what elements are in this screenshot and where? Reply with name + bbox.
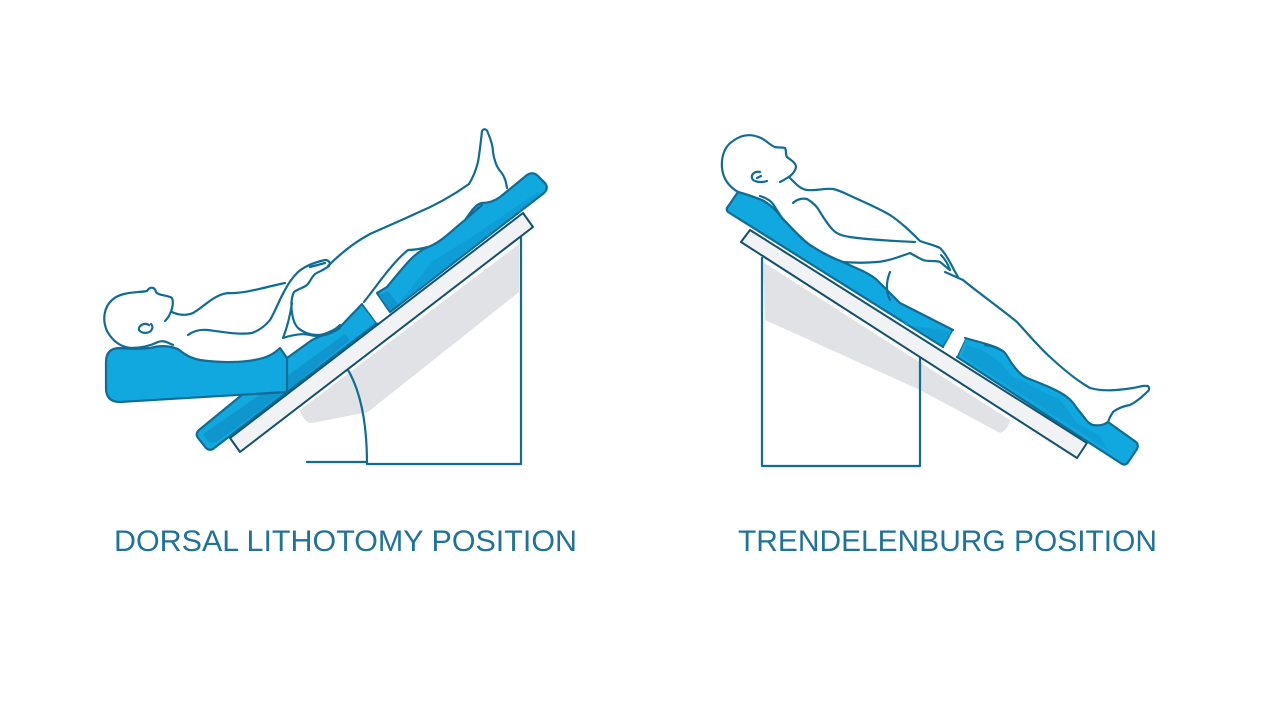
neck and arm top (790, 178, 958, 277)
mattress (727, 192, 1138, 465)
head outline (722, 135, 796, 192)
figure: patient, head raised on pillow (104, 129, 507, 348)
arm and hand (188, 260, 340, 335)
heel notch (985, 345, 1004, 352)
thumb fold (941, 255, 950, 270)
leg underside (364, 247, 428, 302)
panel: dorsal lithotomy position (104, 129, 547, 464)
white strap (944, 331, 965, 356)
tilted board (741, 230, 1087, 458)
chest and arm inner (793, 199, 915, 242)
hip line (283, 328, 340, 338)
figure: patient, head down (722, 135, 1149, 422)
head pillow (106, 346, 287, 402)
leg top and foot (945, 272, 1149, 422)
table base shadow (300, 244, 519, 423)
table base shadow (763, 262, 1010, 433)
neck and shoulder (172, 283, 285, 315)
tilted board (230, 213, 533, 452)
upper mattress (377, 173, 547, 312)
table base outline (762, 258, 920, 466)
body underside and hand (760, 196, 950, 270)
panel: trendelenburg position (722, 135, 1149, 466)
toe notch (467, 205, 482, 218)
hip line (887, 272, 890, 300)
fingers (310, 263, 325, 267)
label: trendelenburg position: TRENDELENBURG POSITION (738, 525, 1157, 558)
ear (752, 172, 767, 182)
leg top and foot (328, 129, 507, 266)
upper arm back line (283, 303, 292, 338)
table base outline (307, 236, 521, 464)
ear (139, 324, 152, 333)
label: dorsal lithotomy position: DORSAL LITHOTOMY POSITION (114, 525, 577, 558)
white strap (363, 294, 391, 323)
head outline (104, 288, 173, 348)
lower mattress (197, 304, 377, 450)
